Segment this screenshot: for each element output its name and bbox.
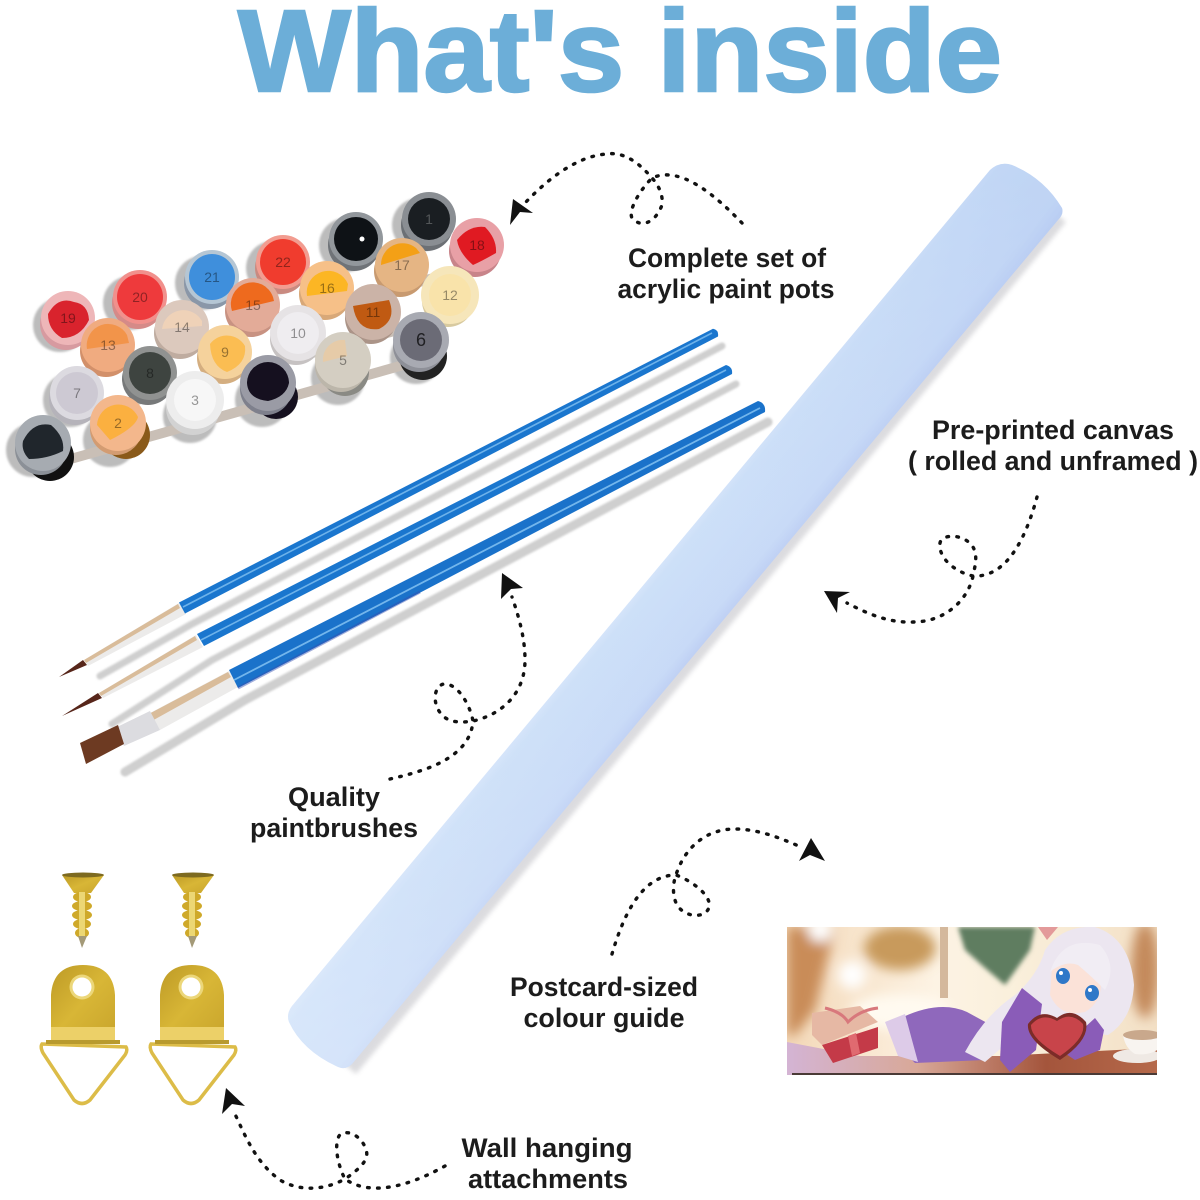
pot 19 bbox=[40, 291, 95, 350]
sleeve bbox=[1000, 988, 1042, 1072]
pot 2 bbox=[90, 395, 150, 459]
pot 10 bbox=[270, 305, 326, 365]
pot 9 bbox=[197, 325, 252, 384]
pot 21 bbox=[184, 250, 239, 309]
pot 16 bbox=[299, 261, 354, 320]
pot 11: 11 bbox=[366, 304, 380, 320]
icon: screw right bbox=[172, 872, 214, 948]
label: paint pots bbox=[618, 243, 834, 304]
dress ruffle bbox=[885, 1014, 918, 1062]
label: paintbrushes: Quality bbox=[288, 782, 380, 812]
pot 4 bbox=[240, 355, 298, 419]
pot 8 bbox=[122, 346, 177, 405]
label: paint pots: Complete set of bbox=[628, 243, 827, 273]
icon: paintbrushes bbox=[59, 329, 768, 772]
label: canvas bbox=[908, 415, 1198, 476]
eyes bbox=[1056, 968, 1099, 1001]
pot 6 bbox=[393, 312, 449, 380]
pot 18 bbox=[449, 218, 504, 277]
pot 6: 6 bbox=[416, 330, 426, 350]
label: colour guide: Postcard-sized bbox=[510, 972, 698, 1002]
pot 18: 18 bbox=[469, 237, 485, 253]
label: paintbrushes: paintbrushes bbox=[250, 813, 418, 843]
pot 11 bbox=[345, 284, 401, 344]
right sleeve bbox=[1067, 1018, 1104, 1060]
pot 22 bbox=[255, 235, 310, 294]
pot 12: 12 bbox=[442, 287, 458, 303]
arrow: canvas bbox=[824, 497, 1037, 622]
label: wall hanging: Wall hanging bbox=[462, 1133, 632, 1163]
pot 8: 8 bbox=[146, 365, 154, 381]
label: paintbrushes bbox=[250, 782, 418, 843]
pot black left bbox=[15, 415, 74, 481]
pot 19: 19 bbox=[60, 310, 76, 326]
pot strip rails bbox=[60, 240, 477, 462]
brush 1 bbox=[59, 329, 718, 677]
pot 7 bbox=[49, 366, 104, 425]
pot 23 bbox=[328, 212, 383, 271]
pot 15 bbox=[225, 278, 280, 337]
pot 22: 22 bbox=[275, 254, 291, 270]
pot 24: 1 bbox=[425, 211, 433, 227]
label: canvas: ( rolled and unframed ) bbox=[908, 446, 1198, 476]
pot 15: 15 bbox=[245, 297, 261, 313]
pot 10: 10 bbox=[290, 325, 306, 341]
coffee cup bbox=[1113, 1030, 1161, 1063]
pot 9: 9 bbox=[221, 344, 229, 360]
pot 24 bbox=[401, 192, 456, 251]
canvas roll bbox=[288, 164, 1066, 1074]
pot 14: 14 bbox=[174, 319, 190, 335]
pot 13: 13 bbox=[100, 337, 116, 353]
scene background bbox=[787, 927, 1157, 1056]
fringe bbox=[1052, 960, 1101, 986]
pot 14 bbox=[154, 300, 209, 359]
face bbox=[1050, 960, 1101, 1013]
pot 17: 17 bbox=[394, 257, 410, 273]
ribbon bbox=[1038, 927, 1058, 940]
pot 20: 20 bbox=[132, 289, 148, 305]
brush shadows bbox=[100, 346, 768, 772]
pot 2: 2 bbox=[114, 415, 122, 431]
pot 13 bbox=[80, 318, 135, 377]
table bbox=[787, 1042, 1157, 1075]
pot 5: 5 bbox=[339, 352, 347, 368]
icon: hanger right bbox=[150, 965, 236, 1104]
icon: hanger left bbox=[41, 965, 127, 1104]
pot 17 bbox=[374, 238, 429, 297]
arrow: paintbrushes bbox=[390, 573, 525, 779]
label: wall hanging: attachments bbox=[468, 1164, 628, 1194]
label: canvas: Pre-printed canvas bbox=[932, 415, 1174, 445]
pot 5 bbox=[315, 332, 371, 396]
pot 3 bbox=[166, 371, 224, 435]
arrow: wall hanging bbox=[222, 1088, 445, 1188]
label: colour guide: colour guide bbox=[524, 1003, 684, 1033]
brush 2 bbox=[62, 365, 732, 716]
dress bbox=[906, 1007, 986, 1063]
colour guide picture bbox=[787, 918, 1161, 1075]
icon: paint pot set bbox=[6, 192, 504, 481]
pot 12 bbox=[421, 266, 479, 327]
hair bbox=[965, 927, 1134, 1062]
pot 3: 3 bbox=[191, 392, 199, 408]
label: wall hanging bbox=[462, 1133, 632, 1194]
label: colour guide bbox=[510, 972, 698, 1033]
heart bbox=[1028, 1013, 1086, 1060]
pot 21: 21 bbox=[204, 269, 220, 285]
pot 20 bbox=[112, 270, 167, 329]
brush 3 bbox=[80, 401, 765, 764]
arrow: colour guide bbox=[612, 829, 825, 954]
pot cast shadows bbox=[6, 198, 446, 477]
label: paint pots: acrylic paint pots bbox=[618, 274, 834, 304]
pot 16: 16 bbox=[319, 280, 335, 296]
pot 7: 7 bbox=[73, 385, 81, 401]
arrow: paint pots bbox=[510, 154, 742, 225]
icon: screw left bbox=[62, 872, 104, 948]
gift box bbox=[812, 1006, 878, 1063]
